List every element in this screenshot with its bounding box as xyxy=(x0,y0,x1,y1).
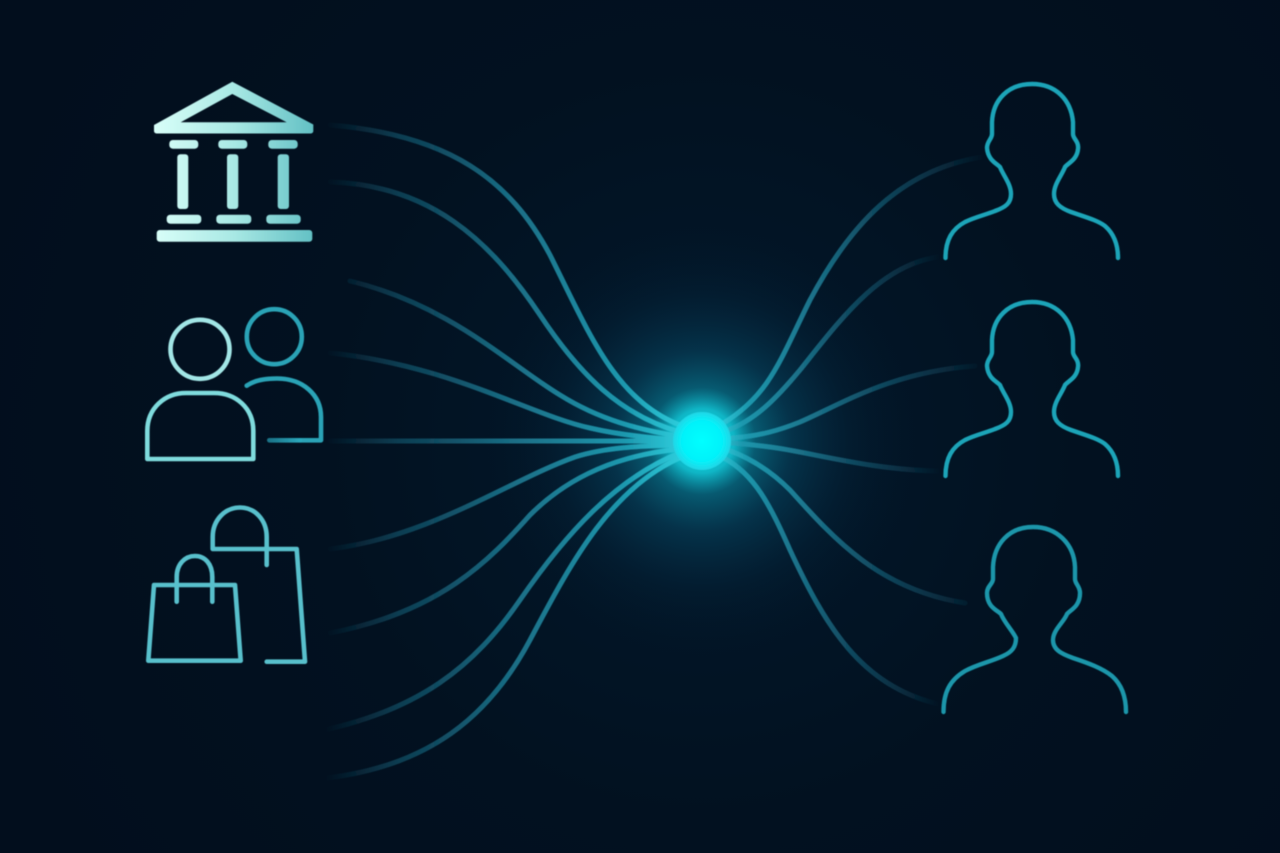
front person xyxy=(147,320,253,459)
icon: person silhouette middle xyxy=(946,302,1118,476)
large bag xyxy=(213,508,305,662)
central glow xyxy=(487,226,917,656)
small bag xyxy=(148,556,241,661)
icon: two people xyxy=(147,309,321,459)
pediment roof xyxy=(154,82,313,134)
column bases xyxy=(167,215,301,224)
plinth xyxy=(157,230,312,242)
icon: shopping bags xyxy=(148,508,305,662)
central hub node xyxy=(673,412,731,470)
icon: person silhouette top xyxy=(946,84,1118,258)
back person xyxy=(247,309,321,440)
columns xyxy=(177,154,289,209)
icon: bank building xyxy=(154,82,313,242)
icon: person silhouette bottom xyxy=(944,527,1126,712)
connection lines from sources xyxy=(310,125,684,779)
connection lines to people xyxy=(722,157,982,704)
capitals xyxy=(169,140,298,149)
